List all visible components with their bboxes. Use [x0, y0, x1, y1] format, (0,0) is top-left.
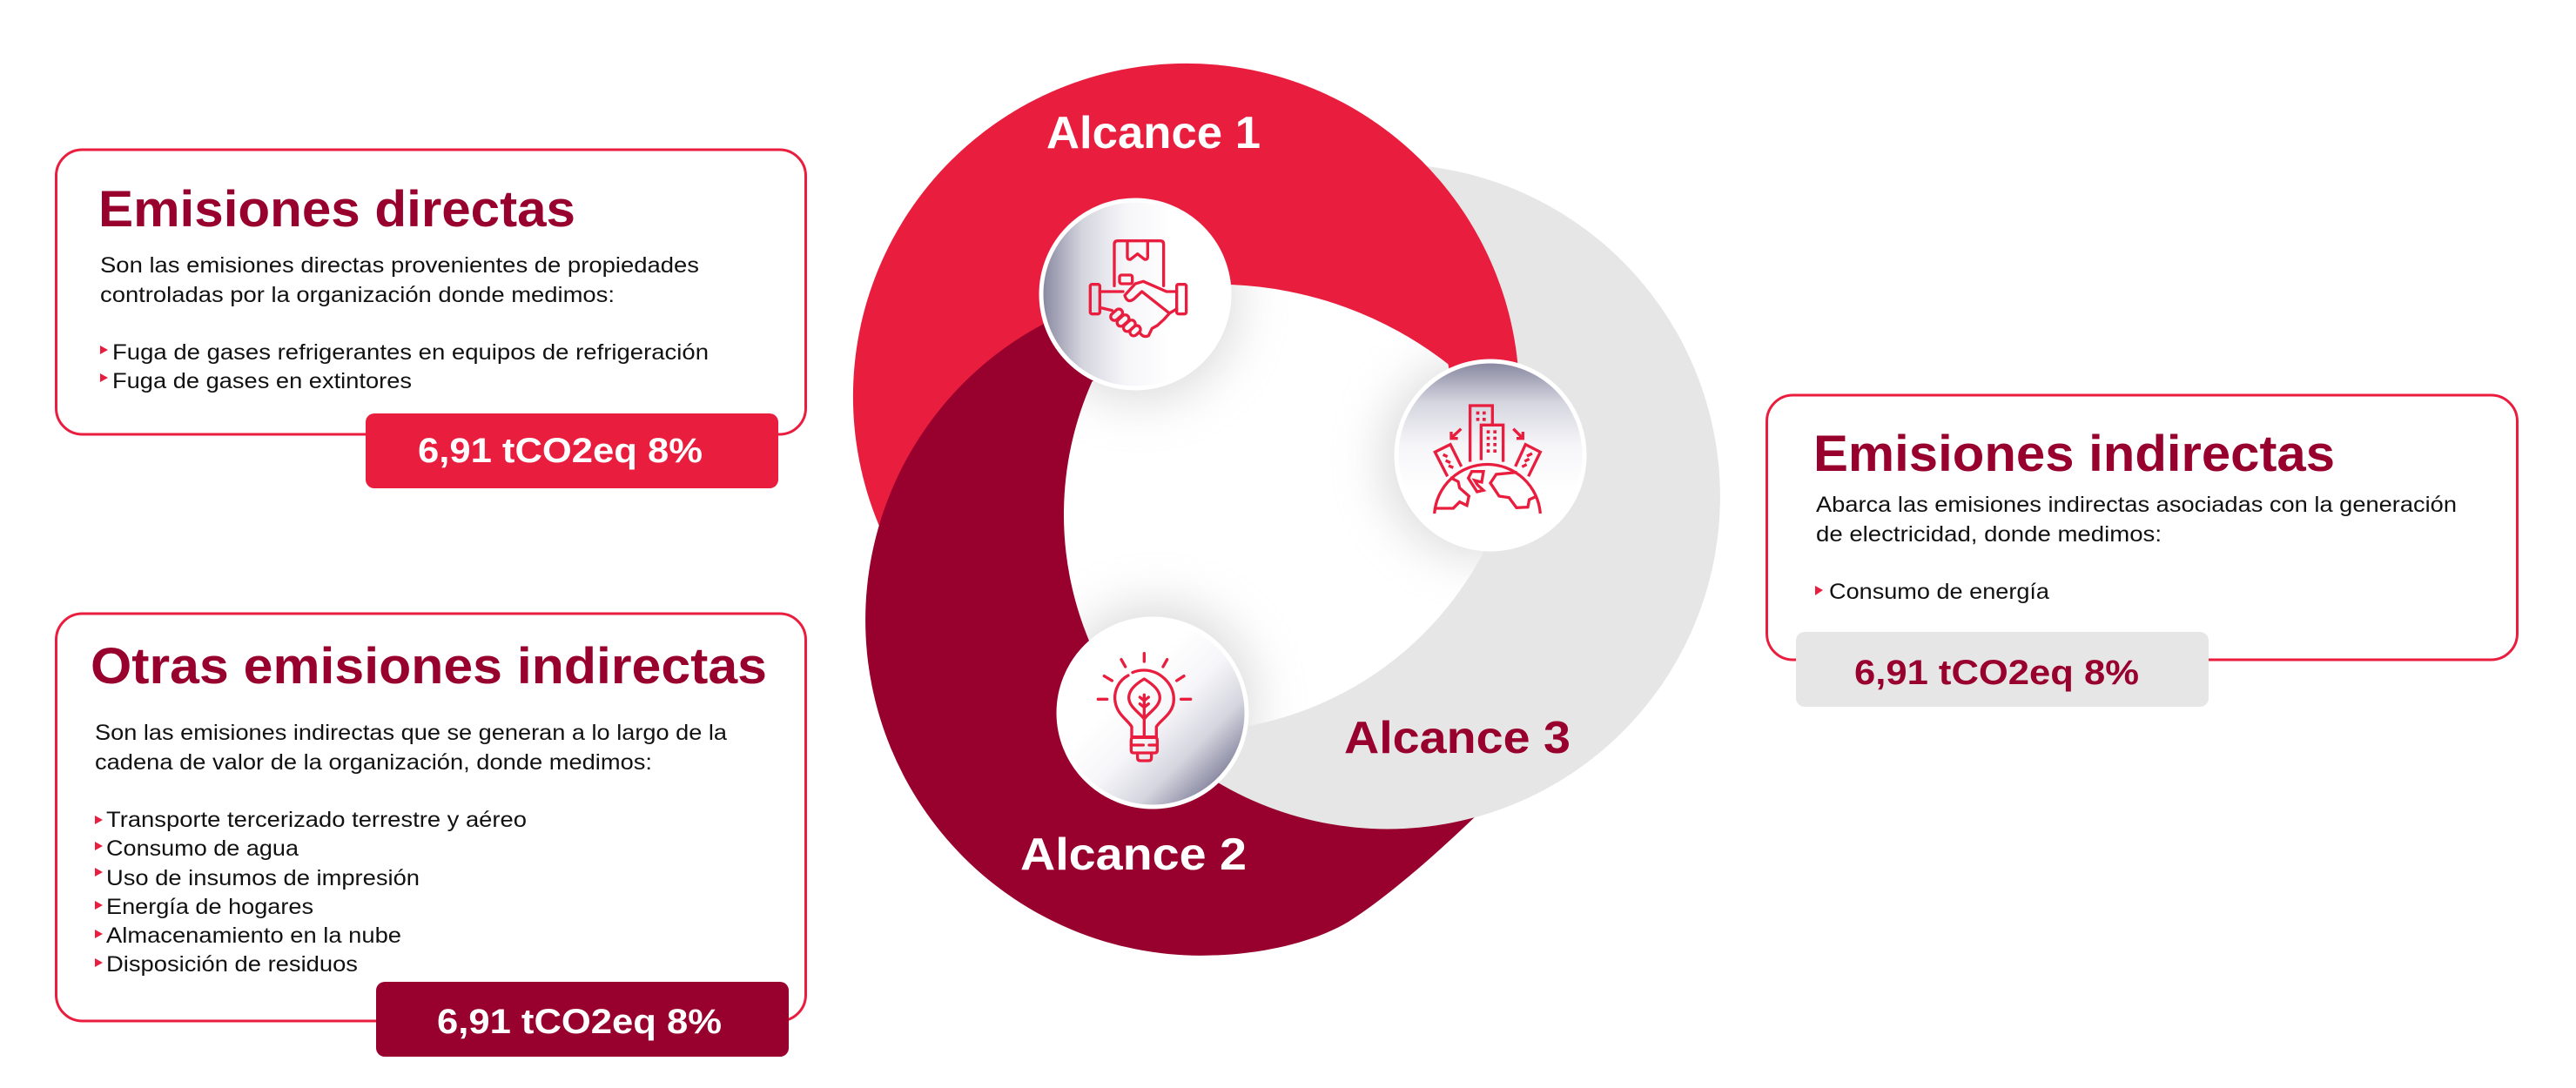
- description text: controladas por la organización donde medimos:: [100, 283, 615, 307]
- bullet list: Fuga de gases refrigerantes en equipos de refrigeración: [112, 340, 709, 365]
- bullet list: Uso de insumos de impresión: [106, 866, 420, 890]
- description text: Son las emisiones directas provenientes de propiedades: [100, 253, 699, 278]
- value badge: [366, 413, 778, 488]
- bullet list: Almacenamiento en la nube: [106, 923, 401, 948]
- description text: [95, 721, 727, 775]
- description text: Son las emisiones indirectas que se generan a lo largo de la: [95, 721, 727, 745]
- icon: city on globe: [1396, 361, 1584, 549]
- panel outline: [56, 150, 806, 434]
- scope 3 overlap over dark red: [1219, 543, 1537, 829]
- bullet list: Consumo de agua: [106, 836, 299, 861]
- scope 1 red circle: [853, 64, 1519, 729]
- bullet list: [100, 340, 709, 393]
- value badge: [1796, 632, 2209, 707]
- heading: Otras emisiones indirectas: Otras emisiones indirectas: [91, 638, 767, 695]
- description text: cadena de valor de la organización, donde medimos:: [95, 750, 652, 775]
- label: Alcance 3: Alcance 3: [1344, 713, 1570, 763]
- bullet list: Disposición de residuos: [106, 952, 358, 977]
- panel outline: [56, 614, 806, 1021]
- value badge: 6,91 tCO2eq 8%: [1854, 654, 2139, 692]
- bullet list: [95, 808, 527, 977]
- label: Alcance 1: Alcance 1: [1046, 108, 1261, 158]
- bullet list: Consumo de energía: [1829, 580, 2049, 604]
- value badge: 6,91 tCO2eq 8%: [437, 1003, 722, 1041]
- white centre: [1064, 285, 1482, 725]
- panel: Otras emisiones indirectas: [56, 614, 806, 1057]
- scope 3 gray circle: [1055, 164, 1720, 829]
- value badge: 6,91 tCO2eq 8%: [418, 432, 703, 470]
- heading: Emisiones directas: Emisiones directas: [98, 181, 575, 238]
- label: Alcance 2: Alcance 2: [1020, 829, 1247, 880]
- value badge: [376, 982, 789, 1057]
- icon: handshake with box: [1041, 200, 1229, 388]
- description text: [1816, 493, 2457, 547]
- description text: Abarca las emisiones indirectas asociadas con la generación: [1816, 493, 2457, 517]
- heading: Emisiones indirectas: Emisiones indirectas: [1813, 426, 2335, 482]
- bullet list: Transporte tercerizado terrestre y aéreo: [106, 808, 527, 832]
- description text: de electricidad, donde medimos:: [1816, 522, 2162, 547]
- chart: three overlapping scope circles: [853, 64, 1720, 956]
- panel: Emisiones directas: [56, 150, 806, 488]
- panel: Emisiones indirectas: [1767, 395, 2518, 707]
- panel outline: [1767, 395, 2518, 660]
- bullet list: Energía de hogares: [106, 895, 313, 919]
- scope 2 dark red blob: [865, 285, 1537, 956]
- icon: light bulb with leaf: [1059, 619, 1247, 807]
- bullet list: Fuga de gases en extintores: [112, 369, 412, 393]
- description text: [100, 253, 699, 307]
